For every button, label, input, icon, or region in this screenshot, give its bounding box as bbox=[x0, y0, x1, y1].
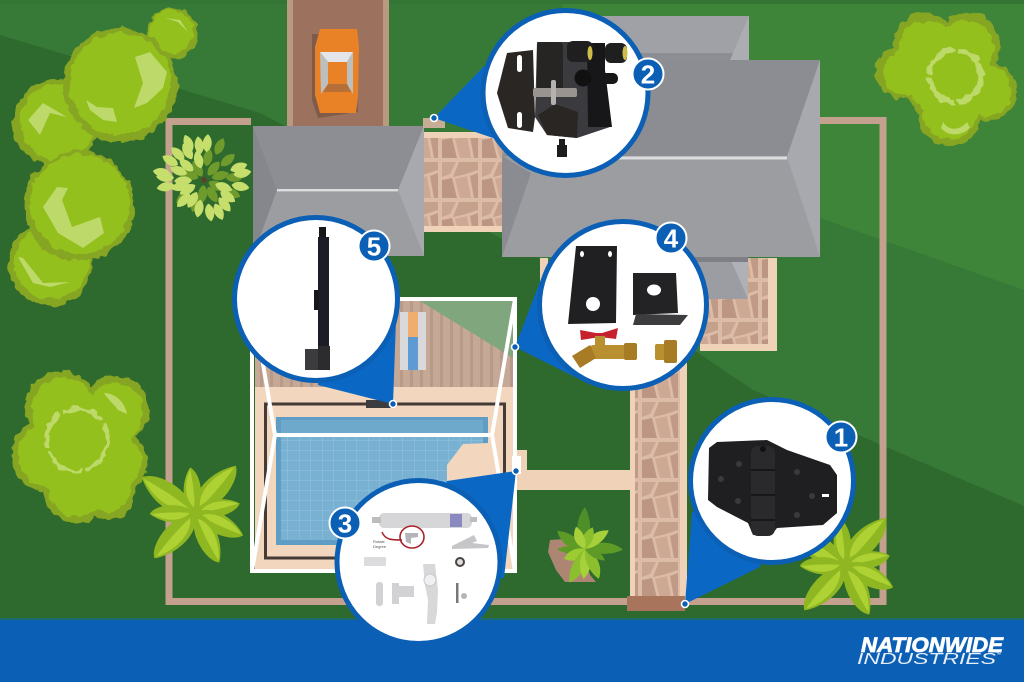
pointer bbox=[316, 299, 396, 404]
pool deck bbox=[255, 387, 513, 573]
latch mount bbox=[366, 400, 393, 408]
product: tall bracket bbox=[568, 246, 617, 324]
number badge 4: 4 bbox=[664, 224, 679, 254]
pointer dot bbox=[682, 600, 688, 608]
lower block bbox=[538, 104, 578, 138]
bolt bbox=[533, 88, 577, 97]
peg bbox=[557, 145, 567, 157]
product: door handle bbox=[423, 564, 438, 624]
number badge 1 bbox=[826, 422, 856, 452]
paved walkway: entry bbox=[424, 132, 502, 232]
enclosure frame bbox=[252, 299, 515, 571]
swimming pool bbox=[276, 417, 488, 546]
pointer bbox=[685, 481, 772, 604]
gate base bbox=[627, 596, 685, 611]
rock bbox=[548, 538, 596, 582]
callout 5: magnetic latch post bbox=[234, 218, 398, 408]
red detail circle with bracket bbox=[382, 526, 424, 548]
shrub palm by pool bbox=[135, 458, 247, 567]
product: brass coupling bbox=[655, 340, 677, 363]
pointer dot bbox=[430, 114, 438, 122]
product: hasp parts bbox=[376, 582, 414, 606]
main roof bbox=[502, 60, 820, 257]
wood deck bbox=[255, 301, 513, 387]
paved walkway: path to gate bbox=[630, 360, 687, 600]
tree: small leafy tree bbox=[152, 133, 252, 222]
product: black hinge bbox=[708, 440, 837, 536]
driveway with car bbox=[287, 0, 389, 127]
body bbox=[535, 42, 610, 138]
number badge 3: 3 bbox=[338, 508, 352, 538]
pool enclosure bbox=[252, 299, 521, 573]
tree: top cluster left bbox=[8, 8, 197, 306]
INDUSTRIES wordmark: INDUSTRIES bbox=[857, 651, 997, 668]
tree: top right bbox=[876, 13, 1017, 146]
shrub plant by path bbox=[554, 507, 623, 586]
lower extension bbox=[640, 258, 748, 299]
arm and knob bbox=[583, 73, 618, 84]
paved walkway: side patio bbox=[540, 258, 777, 351]
lounge chair bbox=[400, 312, 426, 370]
pointer bbox=[418, 471, 516, 578]
product: ring nut bbox=[456, 558, 464, 566]
product: angled bracket bbox=[633, 273, 688, 325]
product: bracket bbox=[452, 535, 489, 549]
number badge 5: 5 bbox=[367, 232, 381, 262]
pointer dot bbox=[512, 344, 518, 350]
NATIONWIDE wordmark: NATIONWIDE bbox=[861, 634, 1004, 657]
number badge 2 bbox=[632, 58, 664, 90]
bottom band bbox=[0, 618, 1024, 682]
shrub palm by fence corner bbox=[785, 510, 897, 619]
number badge 1: 1 bbox=[834, 422, 848, 452]
number badge 2: 2 bbox=[641, 60, 655, 90]
product: screw and nut bbox=[456, 583, 467, 603]
left plate bbox=[497, 50, 535, 132]
pool fence bbox=[266, 404, 504, 558]
pointer bbox=[515, 274, 623, 382]
tree: bottom left bbox=[11, 371, 149, 523]
product: brass valve bbox=[572, 328, 637, 368]
icon: orange car bbox=[312, 29, 359, 118]
cylinders bbox=[567, 41, 593, 62]
logo bbox=[857, 634, 1004, 668]
roof: main house bbox=[502, 16, 820, 299]
callout 2: latch bbox=[430, 10, 664, 176]
product: black post latch bbox=[305, 227, 330, 370]
trademark: ™ bbox=[996, 652, 1001, 658]
gate walkway and side landing bbox=[517, 450, 632, 490]
product: black latch bbox=[497, 41, 628, 157]
callout 3: gate closer kit bbox=[330, 468, 520, 644]
number badge 5 bbox=[358, 230, 390, 262]
callout 4: brackets and valve bbox=[512, 222, 706, 388]
small caption bbox=[373, 539, 387, 549]
pointer dot bbox=[512, 468, 520, 474]
gate post top bbox=[423, 118, 445, 128]
gate bbox=[512, 456, 521, 474]
product: closer tube bbox=[372, 513, 477, 528]
rear plate bbox=[587, 43, 612, 127]
small caption: Degree bbox=[373, 544, 387, 549]
pointer bbox=[434, 66, 565, 138]
slots bbox=[517, 55, 522, 72]
number badge 3 bbox=[330, 508, 360, 538]
upper wing bbox=[590, 16, 749, 60]
callout 1: hinge bbox=[682, 400, 856, 608]
pointer dot bbox=[390, 400, 396, 408]
product: striker bbox=[364, 557, 386, 566]
roof: left wing bbox=[253, 126, 424, 256]
fence bbox=[169, 120, 883, 602]
small caption: Rotate bbox=[373, 539, 386, 544]
number badge 4 bbox=[656, 222, 686, 254]
